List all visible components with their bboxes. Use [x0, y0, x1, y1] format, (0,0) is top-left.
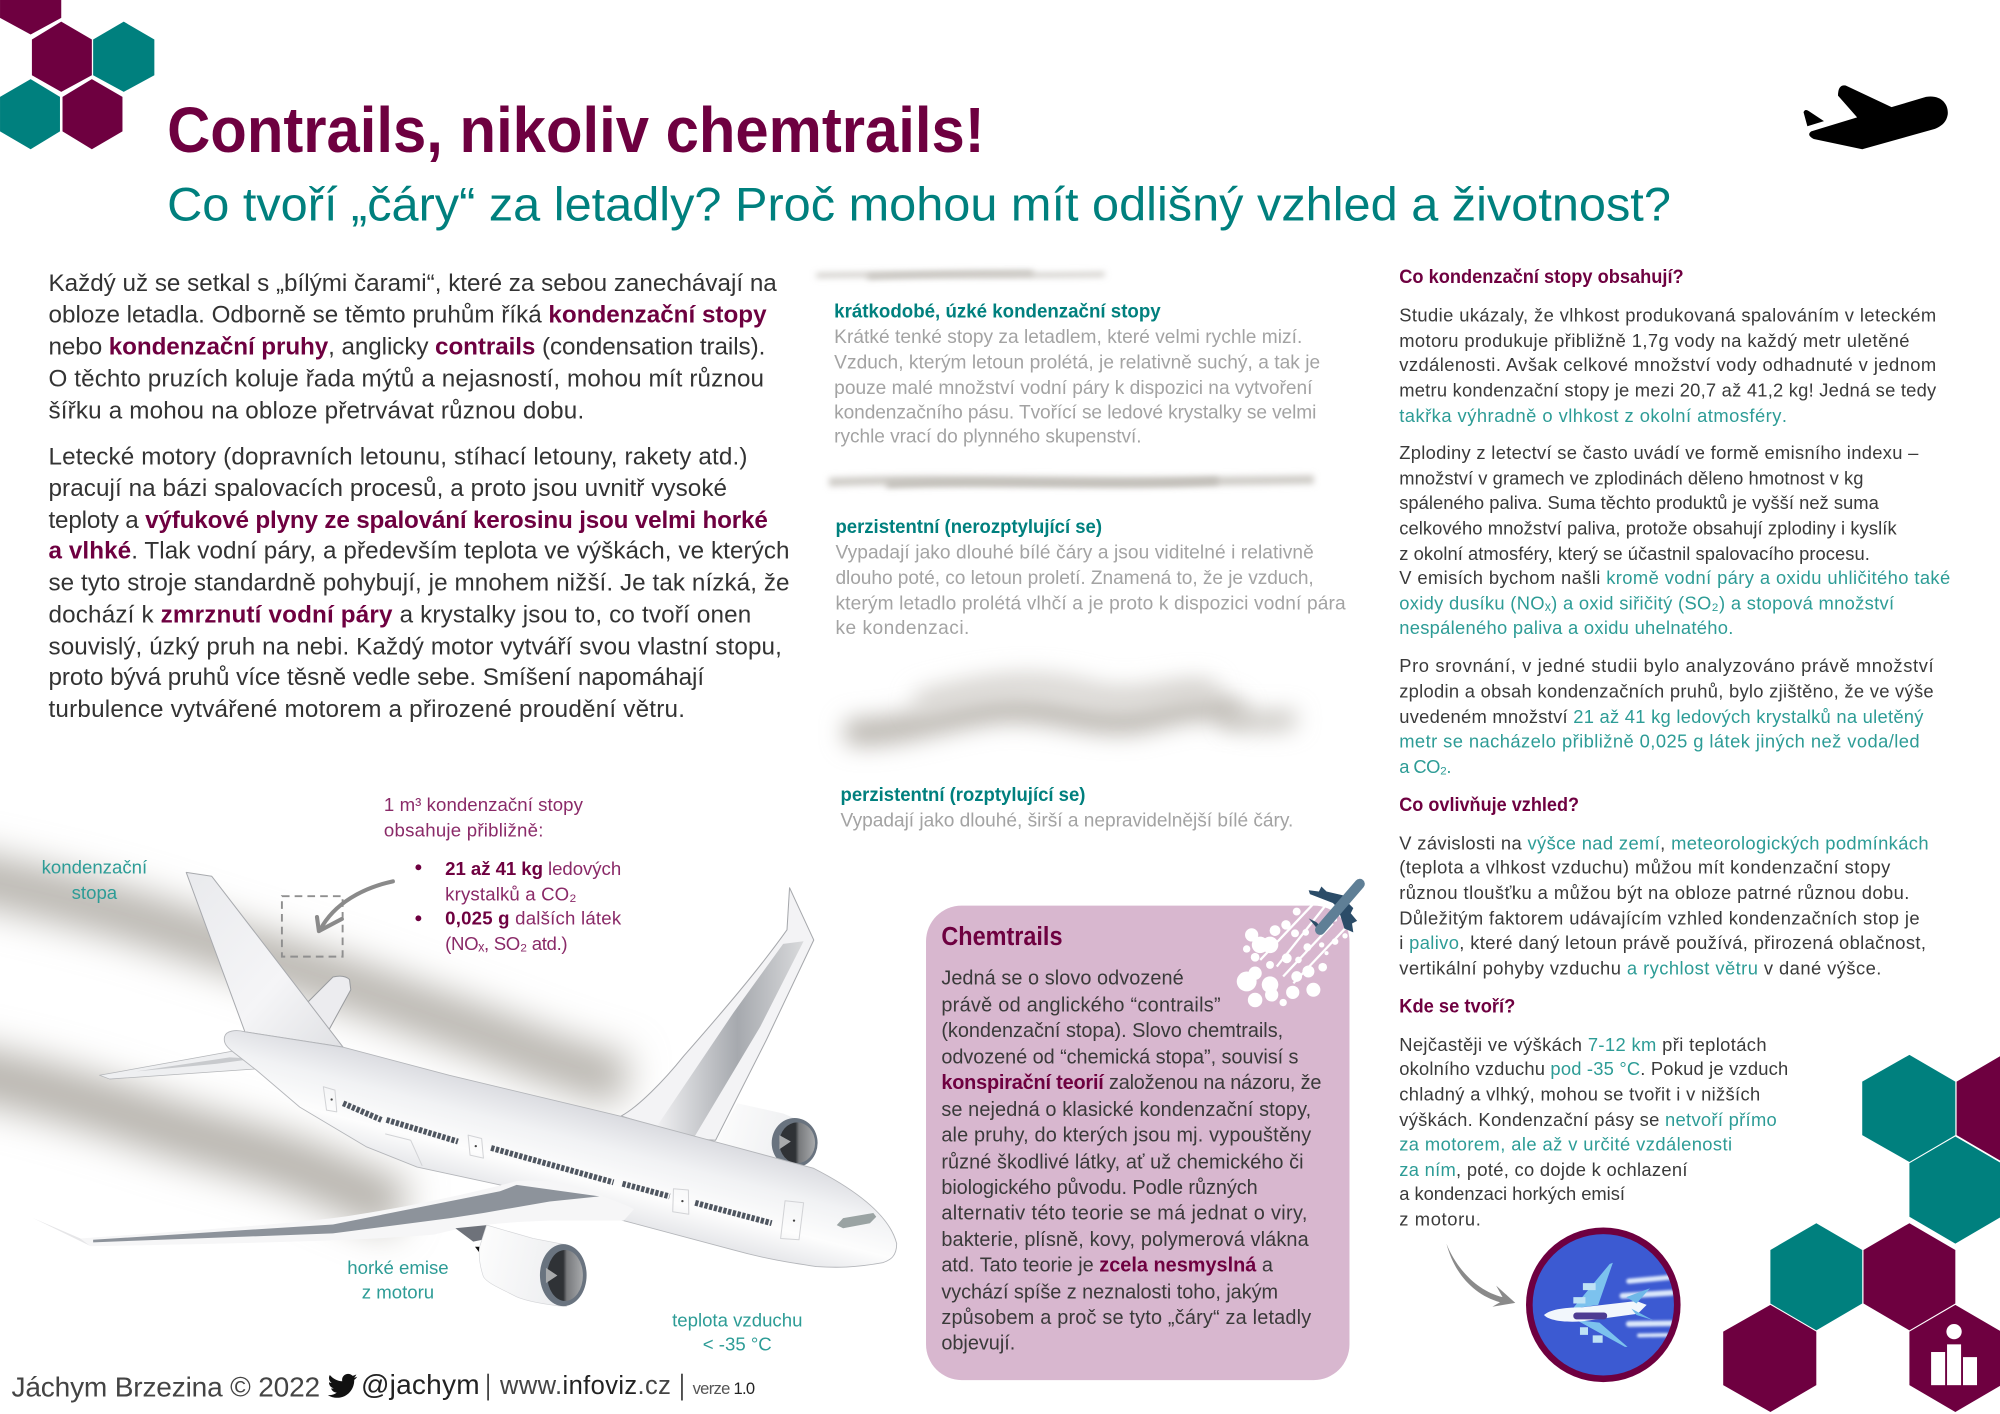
- text block: engines paragraph: turbulence vytvářené motorem a přirozené proudění větru.: [48, 696, 685, 723]
- text block: what contrails contain: z okolní atmosféry, který se účastnil spalovacího procesu.: [1399, 543, 1870, 564]
- text block: engines paragraph: Letecké motory (dopravních letounu, stíhací letouny, rakety atd.): [48, 443, 747, 470]
- near wing: [33, 1181, 634, 1246]
- text block: where they form: Nejčastěji ve výškách 7-12 km při teplotách: [1399, 1034, 1767, 1055]
- text block: intro paragraph: [48, 270, 777, 424]
- text block: engines paragraph: dochází k zmrznutí vodní páry a krystalky jsou to, co tvoří onen: [48, 601, 751, 628]
- text block: one cubic metre composition: 21 až 41 kg ledových: [445, 858, 621, 879]
- panel body text: alternativ této teorie se má jednat o viry,: [941, 1202, 1307, 1224]
- text block: one cubic metre composition: obsahuje přibližně:: [384, 820, 543, 841]
- text block: what influences appearance: vertikální pohyby vzduchu a rychlost větru v dané výšce.: [1399, 957, 1881, 978]
- panel body text: vychází spíše z neznalosti toho, jakým: [941, 1281, 1278, 1303]
- label: hot emissions: horké emise: [347, 1257, 449, 1278]
- text block: what contrails contain: V emisích bychom našli kromě vodní páry a oxidu uhličitého také: [1399, 567, 1950, 588]
- text block: what contrails contain: množství v gramech ve zplodinách děleno hmotnost v kg: [1399, 468, 1864, 489]
- text block: persistent dispersing: [841, 785, 1293, 832]
- text block: engines paragraph: pracují na bázi spalovacích procesů, a proto jsou uvnitř vysoké: [48, 475, 727, 502]
- panel body text: právě od anglického “contrails”: [941, 994, 1221, 1016]
- text block: one cubic metre composition: 1 m³ kondenzační stopy: [384, 794, 584, 815]
- footer credits: @jachym: [361, 1369, 480, 1400]
- text block: what contrails contain: Zplodiny z letectví se často uvádí ve formě emisního indexu –: [1399, 442, 1919, 463]
- text block: engines paragraph: a vlhké. Tlak vodní páry, a především teplota ve výškách, ve kterých: [48, 538, 790, 565]
- text block: one cubic metre composition: krystalků a CO₂: [445, 883, 577, 904]
- text block: intro paragraph: obloze letadla. Odborně se těmto pruhům říká kondenzační stopy: [48, 302, 767, 329]
- text block: persistent non-dispersing: kterým letadlo prolétá vlhčí a je proto k dispozici vodní pára: [835, 594, 1346, 615]
- text block: what contrails contain: uvedeném množství 21 až 41 kg ledových krystalků na uletěný: [1399, 706, 1924, 727]
- footer credits: [12, 1369, 755, 1403]
- footer credits: www.infoviz.cz: [499, 1372, 671, 1400]
- label: hot emissions: z motoru: [362, 1281, 434, 1302]
- text block: what influences appearance: i palivo, které daný letoun právě používá, přirozená oblačnost,: [1399, 932, 1926, 953]
- illustration: narrow contrail: [816, 273, 1105, 277]
- text block: persistent non-dispersing: perzistentní (nerozptylující se): [835, 517, 1102, 538]
- text block: where they form: okolního vzduchu pod -35 °C. Pokud je vzduch: [1399, 1058, 1788, 1079]
- near stabilizer: [100, 1051, 269, 1079]
- decorative hexagons bottom right: [1723, 1055, 2000, 1412]
- label: contrail: kondenzační: [42, 857, 148, 878]
- photo: airliner with contrails: [1526, 1228, 1681, 1382]
- panel body text: způsobem a proč se tyto „čáry“ za letadly: [941, 1307, 1311, 1329]
- text block: what contrails contain: nespáleného paliva a oxidu uhelnatého.: [1399, 617, 1733, 638]
- panel body text: ale pruhy, do kterých jsou mj. vypouštěny: [941, 1125, 1311, 1147]
- text block: persistent dispersing: perzistentní (rozptylující se): [841, 785, 1085, 806]
- label: air temperature: [672, 1310, 802, 1355]
- far wing: [621, 888, 814, 1140]
- arrow to photo: [1446, 1244, 1515, 1307]
- text block: short contrails: kondenzačního pásu. Tvořící se ledové krystalky se velmi: [834, 402, 1316, 423]
- text block: what contrails contain: celkového množství paliva, protože obsahují zplodiny i kyslík: [1399, 517, 1897, 538]
- panel body text: konspirační teorií založenou na názoru, že: [941, 1072, 1321, 1094]
- panel: chemtrails: [926, 906, 1349, 1380]
- panel body text: Jedná se o slovo odvozené: [941, 968, 1184, 990]
- panel body text: [941, 968, 1321, 1354]
- text block: persistent non-dispersing: [835, 517, 1346, 639]
- text block: what influences appearance: Co ovlivňuje vzhled?: [1399, 795, 1579, 816]
- text block: what contrails contain: spáleného paliva. Suma těchto produktů je vyšší než suma: [1399, 492, 1880, 513]
- text block: where they form: za ním, poté, co dojde k ochlazení: [1399, 1159, 1688, 1180]
- text block: short contrails: Vzduch, kterým letoun prolétá, je relativně suchý, a tak je: [834, 353, 1320, 374]
- title: Contrails, nikoliv chemtrails!: [167, 94, 985, 166]
- text block: what contrails contain: metr se nacházelo přibližně 0,025 g látek jiných než voda/led: [1399, 730, 1920, 751]
- heading: chemtrails: Chemtrails: [941, 923, 1062, 951]
- panel body text: se nejedná o klasické kondenzační stopy,: [941, 1099, 1311, 1121]
- text block: what contrails contain: metru kondenzační stopy je mezi 20,7 až 41,2 kg! Jedná se tedy: [1399, 380, 1937, 401]
- text block: engines paragraph: teploty a výfukové plyny ze spalování kerosinu jsou velmi horké: [48, 507, 768, 534]
- text block: what influences appearance: [1399, 795, 1929, 978]
- text block: persistent non-dispersing: ke kondenzaci.: [835, 618, 969, 639]
- text block: what contrails contain: oxidy dusíku (NOₓ) a oxid siřičitý (SO₂) a stopová množství: [1399, 593, 1895, 614]
- rear far stabilizer: [307, 976, 351, 1032]
- text block: persistent non-dispersing: dlouho poté, co letoun proletí. Znamená to, že je vzduch,: [835, 568, 1314, 589]
- panel body text: (kondenzační stopa). Slovo chemtrails,: [941, 1020, 1283, 1042]
- text block: what contrails contain: vzdálenosti. Avšak celkové množství vody odhadnuté v jednom: [1399, 354, 1936, 375]
- text block: engines paragraph: [48, 443, 790, 723]
- near engine: [479, 1225, 587, 1307]
- airliner illustration: [33, 872, 897, 1307]
- text block: where they form: za motorem, ale až v určité vzdálenosti: [1399, 1133, 1732, 1154]
- label: hot emissions: [347, 1257, 449, 1302]
- text block: what contrails contain: Studie ukázaly, že vlhkost produkovaná spalováním v leteckém: [1399, 304, 1936, 325]
- icon: infoviz person-bars logo: [1931, 1324, 1977, 1385]
- text block: short contrails: pouze malé množství vodní páry k dispozici na vytvoření: [834, 378, 1313, 399]
- label: air temperature: teplota vzduchu: [672, 1310, 802, 1331]
- contrail background behind airliner: [0, 867, 625, 1209]
- illustration: persistent contrail: [829, 480, 1314, 485]
- arrow to sample square: [317, 881, 393, 931]
- text block: intro paragraph: O těchto pruzích koluje řada mýtů a nejasností, mohou mít různou: [48, 365, 764, 392]
- text block: short contrails: krátkodobé, úzké kondenzační stopy: [834, 302, 1161, 323]
- text block: where they form: z motoru.: [1399, 1209, 1481, 1230]
- text block: engines paragraph: proto bývá pruhů více těsně vedle sebe. Smíšení napomáhají: [48, 664, 704, 691]
- label: contrail: stopa: [72, 882, 118, 903]
- icon: black airplane silhouette: [1804, 85, 1948, 149]
- panel body text: biologického původu. Podle různých: [941, 1177, 1258, 1199]
- dashed sample square: [282, 896, 343, 957]
- text block: intro paragraph: šířku a mohou na obloze přetrvávat různou dobu.: [48, 397, 584, 424]
- text block: what influences appearance: V závislosti na výšce nad zemí, meteorologických podmínkách: [1399, 832, 1929, 853]
- text block: what contrails contain: takřka výhradně o vlhkost z okolní atmosféry.: [1399, 405, 1787, 426]
- text block: intro paragraph: nebo kondenzační pruhy, anglicky contrails (condensation trails).: [48, 334, 765, 361]
- panel body text: bakterie, plísně, kovy, polymerová vlákna: [941, 1229, 1310, 1251]
- icon: twitter bird: [328, 1374, 357, 1398]
- text block: short contrails: [834, 302, 1320, 448]
- text block: what contrails contain: motoru produkuje přibližně 1,7g vody na každý metr uletěné: [1399, 330, 1909, 351]
- text block: where they form: chladný a vlhký, mohou se tvořit i v nižších: [1399, 1084, 1760, 1105]
- subtitle: Co tvoří „čáry“ za letadly? Proč mohou mít odlišný vzhled a životnost?: [167, 179, 1671, 232]
- text block: what influences appearance: různou tloušťku a můžou být na obloze patrné různou dobu.: [1399, 882, 1909, 903]
- label: air temperature: < -35 °C: [703, 1334, 772, 1355]
- cockpit window: [837, 1213, 876, 1228]
- fuselage: [224, 1031, 897, 1267]
- illustration: dispersing contrail: [857, 685, 1288, 732]
- text block: persistent dispersing: Vypadají jako dlouhé, širší a nepravidelnější bílé čáry.: [841, 811, 1293, 832]
- label: contrail: [42, 857, 148, 903]
- panel body text: odvozené od “chemická stopa”, souvisí s: [941, 1047, 1299, 1069]
- text block: one cubic metre composition: 0,025 g dalších látek: [445, 908, 622, 929]
- vertical tail fin: [186, 872, 343, 1047]
- text block: one cubic metre composition: [384, 794, 622, 954]
- far engine: [717, 1103, 818, 1168]
- doors: [323, 1087, 804, 1240]
- text block: what contrails contain: zplodin a obsah kondenzačních pruhů, bylo zjištěno, že ve výše: [1399, 681, 1934, 702]
- footer credits: verze 1.0: [693, 1379, 755, 1398]
- footer credits: Jáchym Brzezina © 2022: [12, 1372, 320, 1403]
- near engine pylon: [455, 1225, 489, 1253]
- text block: where they form: [1399, 997, 1788, 1230]
- text block: engines paragraph: se tyto stroje standardně pohybují, je mnohem nižší. Je tak nízká, že: [48, 570, 790, 597]
- text block: persistent non-dispersing: Vypadají jako dlouhé bílé čáry a jsou viditelné i relativně: [835, 543, 1314, 564]
- text block: what contrails contain: [1399, 267, 1950, 777]
- text block: one cubic metre composition: (NOₓ, SO₂ atd.): [445, 933, 568, 954]
- text block: short contrails: rychle vrací do plynného skupenství.: [834, 427, 1142, 448]
- text block: what influences appearance: (teplota a vlhkost vzduchu) můžou mít kondenzační stopy: [1399, 857, 1891, 878]
- icon: plane spraying clouds: [1237, 884, 1360, 1007]
- decorative hexagons top left: [0, 0, 154, 149]
- text block: where they form: a kondenzaci horkých emisí: [1399, 1183, 1626, 1204]
- text block: where they form: Kde se tvoří?: [1399, 997, 1515, 1018]
- text block: short contrails: Krátké tenké stopy za letadlem, které velmi rychle mizí.: [834, 327, 1302, 348]
- text block: what contrails contain: a CO₂.: [1399, 756, 1452, 777]
- panel body text: objevují.: [941, 1332, 1015, 1354]
- text block: where they form: výškách. Kondenzační pásy se netvoří přímo: [1399, 1109, 1777, 1130]
- text block: what contrails contain: Co kondenzační stopy obsahují?: [1399, 267, 1684, 288]
- windows: [343, 1103, 772, 1223]
- text block: what contrails contain: Pro srovnání, v jedné studii bylo analyzováno právě množství: [1399, 655, 1935, 676]
- text block: engines paragraph: souvislý, úzký pruh na nebi. Každý motor vytváří svou vlastní stopu,: [48, 633, 782, 660]
- panel body text: atd. Tato teorie je zcela nesmyslná a: [941, 1255, 1274, 1277]
- text block: what influences appearance: Důležitým faktorem udávajícím vzhled kondenzačních stop je: [1399, 908, 1920, 929]
- panel body text: různé škodlivé látky, ať už chemického či: [941, 1151, 1304, 1173]
- text block: intro paragraph: Každý už se setkal s „bílými čarami“, které za sebou zanechávají na: [48, 270, 777, 297]
